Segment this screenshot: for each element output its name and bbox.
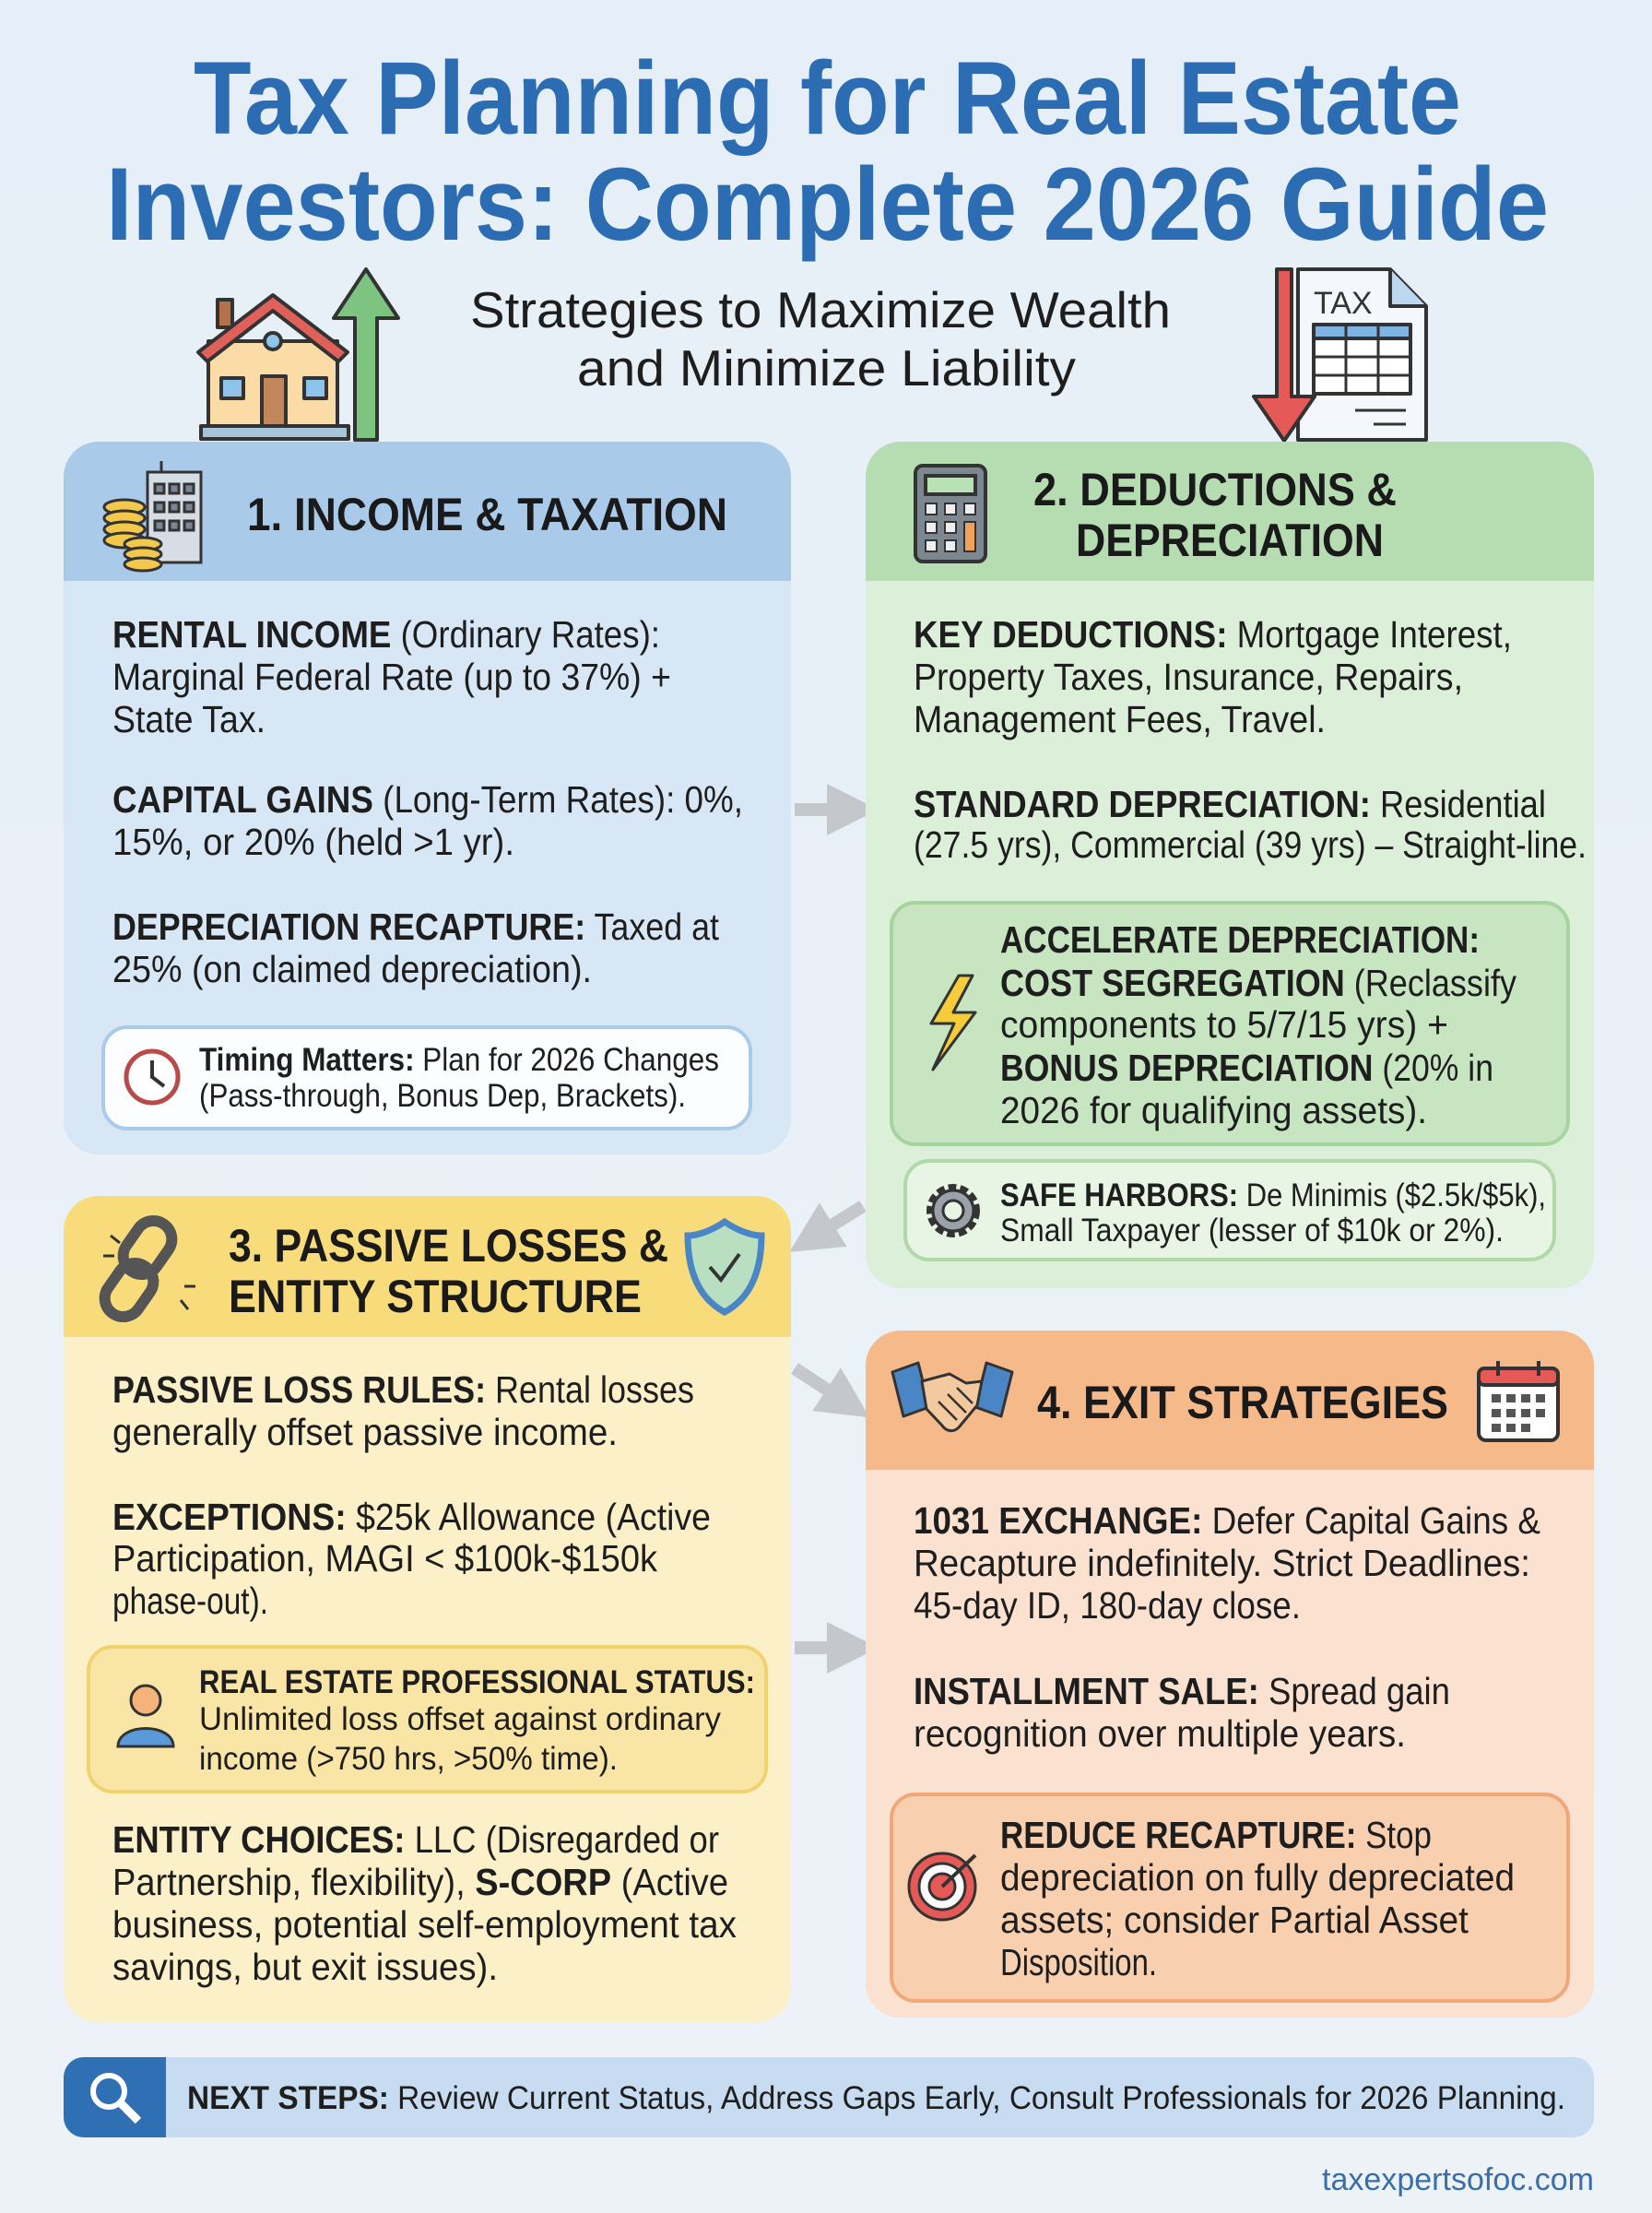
panel: passive losses & entity structure (64, 1196, 791, 2022)
icon: house with up arrow (198, 269, 398, 440)
callout: reduce recapture: assets; consider Partial Asset (1000, 1899, 1469, 1941)
title: Tax Planning for Real Estate (194, 41, 1461, 156)
icon: coins and building (104, 461, 201, 571)
arrow: panel 3 to panel 4 lower (795, 1641, 853, 1654)
arrow: panel 3 to panel 4 (795, 1368, 848, 1403)
icon: handshake (892, 1363, 1012, 1431)
callout: real estate professional status: REAL ESTATE PROFESSIONAL STATUS: (199, 1664, 755, 1700)
icon: magnifier (93, 2076, 138, 2121)
text: installment sale (914, 1670, 1450, 1755)
callout: timing matters: Timing Matters: Plan for 2026 Changes (199, 1042, 719, 1078)
callout: reduce recapture: Disposition. (1000, 1941, 1157, 1983)
callout: timing matters (103, 1027, 750, 1129)
callout: real estate professional status: income (>750 hrs, >50% time). (199, 1741, 618, 1777)
icon: tax document with down arrow: TAX (1314, 286, 1373, 321)
text: exceptions: EXCEPTIONS: $25k Allowance (Active (112, 1496, 711, 1538)
callout: accelerate depreciation: components to 5/7/15 yrs) + (1000, 1003, 1448, 1046)
text: exceptions: Participation, MAGI < $100k-$150k (112, 1537, 657, 1580)
text: depreciation recapture: DEPRECIATION RECAPTURE: Taxed at (112, 905, 720, 948)
panel: income & taxation (64, 442, 791, 1154)
heading: exit strategies: 4. EXIT STRATEGIES (1037, 1377, 1448, 1428)
text: depreciation recapture (112, 905, 720, 990)
text: standard depreciation: STANDARD DEPRECIATION: Residential (914, 783, 1546, 825)
callout: safe harbors: Small Taxpayer (lesser of $10k or 2%). (1000, 1213, 1504, 1249)
text: capital gains: 15%, or 20% (held >1 yr). (112, 821, 514, 863)
text: standard depreciation (914, 783, 1587, 866)
icon: tax document with down arrow (1254, 269, 1426, 441)
text: entity choices (112, 1818, 737, 1988)
text: key deductions: Management Fees, Travel. (914, 698, 1326, 740)
title: Investors: Complete 2026 Guide (106, 147, 1549, 262)
callout: reduce recapture: depreciation on fully depreciated (1000, 1856, 1515, 1899)
callout: accelerate depreciation: ACCELERATE DEPRECIATION: (1000, 918, 1480, 961)
callout: reduce recapture (891, 1794, 1568, 2001)
text: depreciation recapture: 25% (on claimed depreciation). (112, 948, 592, 990)
text: passive loss rules: generally offset passive income. (112, 1411, 618, 1453)
callout: real estate professional status (88, 1647, 766, 1792)
text: rental income: Marginal Federal Rate (up to 37%) + (112, 656, 671, 698)
callout: accelerate depreciation: 2026 for qualifying assets). (1000, 1089, 1427, 1131)
heading: passive losses: ENTITY STRUCTURE (229, 1271, 642, 1322)
arrow: panel 1 to panel 2 (795, 803, 853, 816)
text: passive loss rules: PASSIVE LOSS RULES: Rental losses (112, 1368, 694, 1411)
subtitle: Strategies to Maximize Wealth (470, 281, 1171, 338)
icon: calendar (1479, 1361, 1558, 1440)
heading: income & taxation: 1. INCOME & TAXATION (247, 489, 727, 540)
subtitle (470, 281, 1171, 396)
callout: timing matters: (Pass-through, Bonus Dep, Brackets). (199, 1078, 686, 1114)
callout: safe harbors (905, 1161, 1554, 1260)
text: entity choices: savings, but exit issues). (112, 1946, 498, 1988)
text: exceptions (112, 1496, 711, 1622)
text: key deductions: KEY DEDUCTIONS: Mortgage Interest, (914, 613, 1512, 656)
text: rental income (112, 613, 671, 740)
callout: safe harbors: SAFE HARBORS: De Minimis ($2.5k/$5k), (1000, 1178, 1546, 1213)
heading: passive losses: 3. PASSIVE LOSSES & (229, 1220, 668, 1272)
footer: next steps (64, 2057, 1594, 2137)
icon: target (909, 1853, 975, 1920)
text: exceptions: phase-out). (112, 1580, 268, 1622)
heading: deductions & depreciation (1033, 464, 1397, 566)
icon: clock (126, 1051, 178, 1103)
callout: reduce recapture: REDUCE RECAPTURE: Stop (1000, 1814, 1432, 1856)
text: rental income: State Tax. (112, 698, 266, 740)
heading: deductions & depreciation: 2. DEDUCTIONS & (1033, 464, 1397, 515)
footer: next steps: NEXT STEPS: Review Current Status, Address Gaps Early, Consult Professionals for 2026 Planning. (187, 2080, 1565, 2116)
heading: passive losses (229, 1220, 668, 1322)
text: 1031 exchange: 1031 EXCHANGE: Defer Capital Gains & (914, 1499, 1540, 1542)
text: 1031 exchange: Recapture indefinitely. Strict Deadlines: (914, 1542, 1530, 1584)
arrow: panel 2 to panel 3 (811, 1206, 863, 1238)
website url: taxexpertsofoc.com (1322, 2162, 1594, 2197)
heading: deductions & depreciation: DEPRECIATION (1076, 515, 1384, 566)
text: installment sale: recognition over multiple years. (914, 1712, 1406, 1755)
text: entity choices: Partnership, flexibility), S-CORP (Active (112, 1861, 728, 1903)
text: key deductions (914, 613, 1512, 740)
text: passive loss rules (112, 1368, 694, 1453)
text: installment sale: INSTALLMENT SALE: Spread gain (914, 1670, 1450, 1712)
title (106, 41, 1549, 262)
callout: real estate professional status: Unlimited loss offset against ordinary (199, 1701, 721, 1737)
icon: gear (931, 1189, 975, 1233)
icon: person (118, 1686, 173, 1746)
subtitle: and Minimize Liability (577, 339, 1077, 396)
text: entity choices: ENTITY CHOICES: LLC (Disregarded or (112, 1818, 719, 1861)
icon: calculator (915, 466, 985, 562)
text: capital gains: CAPITAL GAINS (Long-Term Rates): 0%, (112, 778, 743, 821)
icon: broken chain (98, 1213, 195, 1324)
icon: shield (688, 1222, 761, 1312)
text: 1031 exchange: 45-day ID, 180-day close. (914, 1584, 1301, 1627)
panel: exit strategies (866, 1331, 1594, 2018)
icon: lightning (931, 976, 975, 1070)
panel: deductions & depreciation (866, 442, 1594, 1288)
callout: accelerate depreciation: COST SEGREGATION (Reclassify (1000, 962, 1516, 1004)
text: capital gains (112, 778, 743, 863)
callout: accelerate depreciation (891, 903, 1568, 1144)
text: entity choices: business, potential self-employment tax (112, 1903, 737, 1946)
text: key deductions: Property Taxes, Insurance, Repairs, (914, 656, 1463, 698)
text: 1031 exchange (914, 1499, 1540, 1627)
callout: accelerate depreciation: BONUS DEPRECIATION (20% in (1000, 1047, 1493, 1089)
text: rental income: RENTAL INCOME (Ordinary Rates): (112, 613, 660, 656)
